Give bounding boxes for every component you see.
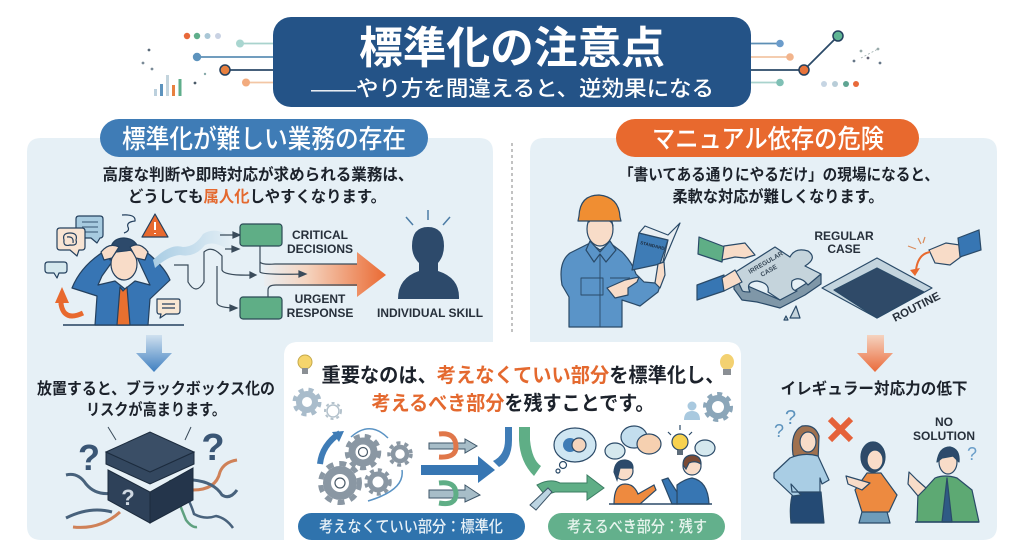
- manual book: STANDARD: [640, 240, 666, 251]
- man with tie: [912, 476, 979, 522]
- icon: lightbulb right: [720, 354, 734, 375]
- header decoration right: [751, 31, 881, 87]
- black box text: リスクが高まります。: [86, 400, 226, 419]
- illustration: puzzle piece and hands: [697, 237, 821, 320]
- icon: individual silhouette: [398, 210, 459, 299]
- icon: decorative gears left: [294, 390, 341, 419]
- illustration: three confused staff: ?: [785, 407, 796, 429]
- illustration: square hole: [822, 258, 932, 318]
- illustration: stressed businessman: [45, 214, 184, 325]
- left intro text: どうしても属人化しやすくなります。: [128, 188, 386, 206]
- thought cloud with brain: [554, 428, 596, 462]
- face: [111, 248, 137, 280]
- label: no solution: SOLUTION: [913, 429, 975, 443]
- illustration: puzzle piece and hands: CASE: [760, 263, 779, 279]
- flow label: critical decisions: DECISIONS: [287, 242, 353, 256]
- label: individual skill: INDIVIDUAL SKILL: [377, 306, 483, 320]
- right bottom pill: 考えるべき部分：残す: [567, 517, 707, 536]
- question marks: ?: [121, 485, 135, 510]
- left bottom pill: [298, 513, 525, 540]
- black box text: 放置すると、ブラックボックス化の: [37, 379, 275, 398]
- left panel background: [27, 138, 493, 540]
- center panel background: [284, 342, 741, 540]
- black box text: [37, 379, 275, 419]
- small question marks: ?: [774, 421, 784, 441]
- left intro text: [102, 165, 414, 206]
- right intro text: [619, 165, 939, 206]
- label: regular case: REGULAR: [814, 229, 874, 243]
- illustration: black box: ?: [201, 427, 225, 469]
- illustration: worker reading manual: [561, 195, 680, 327]
- center message: 考えるべき部分を残すことです。: [372, 391, 654, 415]
- concern bubbles: [76, 216, 103, 243]
- irregular response text: イレギュラー対応力の低下: [780, 380, 968, 398]
- flow label: urgent response: RESPONSE: [287, 306, 353, 320]
- green task boxes: [240, 224, 282, 246]
- title banner: [273, 17, 751, 107]
- warning sign: [142, 214, 168, 237]
- woman: [615, 462, 633, 480]
- icon: person and gear right: [684, 394, 731, 420]
- title: 標準化の注意点: [359, 24, 665, 73]
- rotation arrow: [61, 296, 83, 316]
- center message: [322, 364, 724, 415]
- illustration: three confused staff: [774, 407, 979, 523]
- right intro text: 「書いてある通りにやるだけ」の現場になると、: [619, 165, 939, 184]
- right bottom pill: [548, 513, 725, 540]
- label: regular case: CASE: [827, 242, 861, 256]
- left bottom pill: 考えなくていい部分：標準化: [319, 518, 503, 536]
- arrows: process merge: [421, 427, 604, 510]
- illustration: puzzle piece and hands: IRREGULAR: [748, 250, 785, 276]
- arrow: orange down: [857, 335, 893, 372]
- center message: 重要なのは、考えなくていい部分を標準化し、: [322, 364, 724, 387]
- flow label: critical decisions: CRITICAL: [292, 228, 348, 242]
- illustration: gears cluster: [320, 429, 411, 502]
- woman shrugging: [859, 508, 890, 523]
- woman thinking: [790, 492, 824, 523]
- red cross: [830, 419, 851, 440]
- illustration: black box: ?: [78, 437, 100, 478]
- right heading pill: マニュアル依存の危険: [652, 124, 884, 154]
- flow label: urgent response: URGENT: [295, 292, 346, 306]
- chat bubbles: [621, 426, 647, 448]
- illustration: discussion: [554, 425, 715, 504]
- subtitle: ——やり方を間違えると、逆効果になる: [311, 77, 714, 101]
- big gradient arrow: [264, 252, 386, 297]
- illustration: pointing hand: [908, 230, 981, 276]
- shirt and arms: [72, 248, 170, 325]
- idea bulb: [672, 434, 688, 450]
- illustration: black box: [66, 427, 237, 528]
- hands: [607, 277, 639, 298]
- label: routine: ROUTINE: [891, 290, 943, 325]
- header decoration left: [142, 33, 273, 96]
- right intro text: 柔軟な対応が難しくなります。: [672, 187, 884, 206]
- label: no solution: NO: [935, 415, 953, 429]
- icon: lightbulb left: [298, 355, 312, 374]
- right panel background: [530, 138, 997, 540]
- left heading pill: 標準化が難しい業務の存在: [122, 124, 406, 154]
- right heading pill: [616, 119, 919, 157]
- man: [683, 457, 701, 475]
- illustration: three confused staff: ?: [967, 444, 977, 464]
- left intro text: 高度な判断や即時対応が求められる業務は、: [102, 165, 414, 184]
- arrow: blue down: [136, 335, 172, 372]
- flow diagram: tasks into individual skill: [153, 224, 386, 319]
